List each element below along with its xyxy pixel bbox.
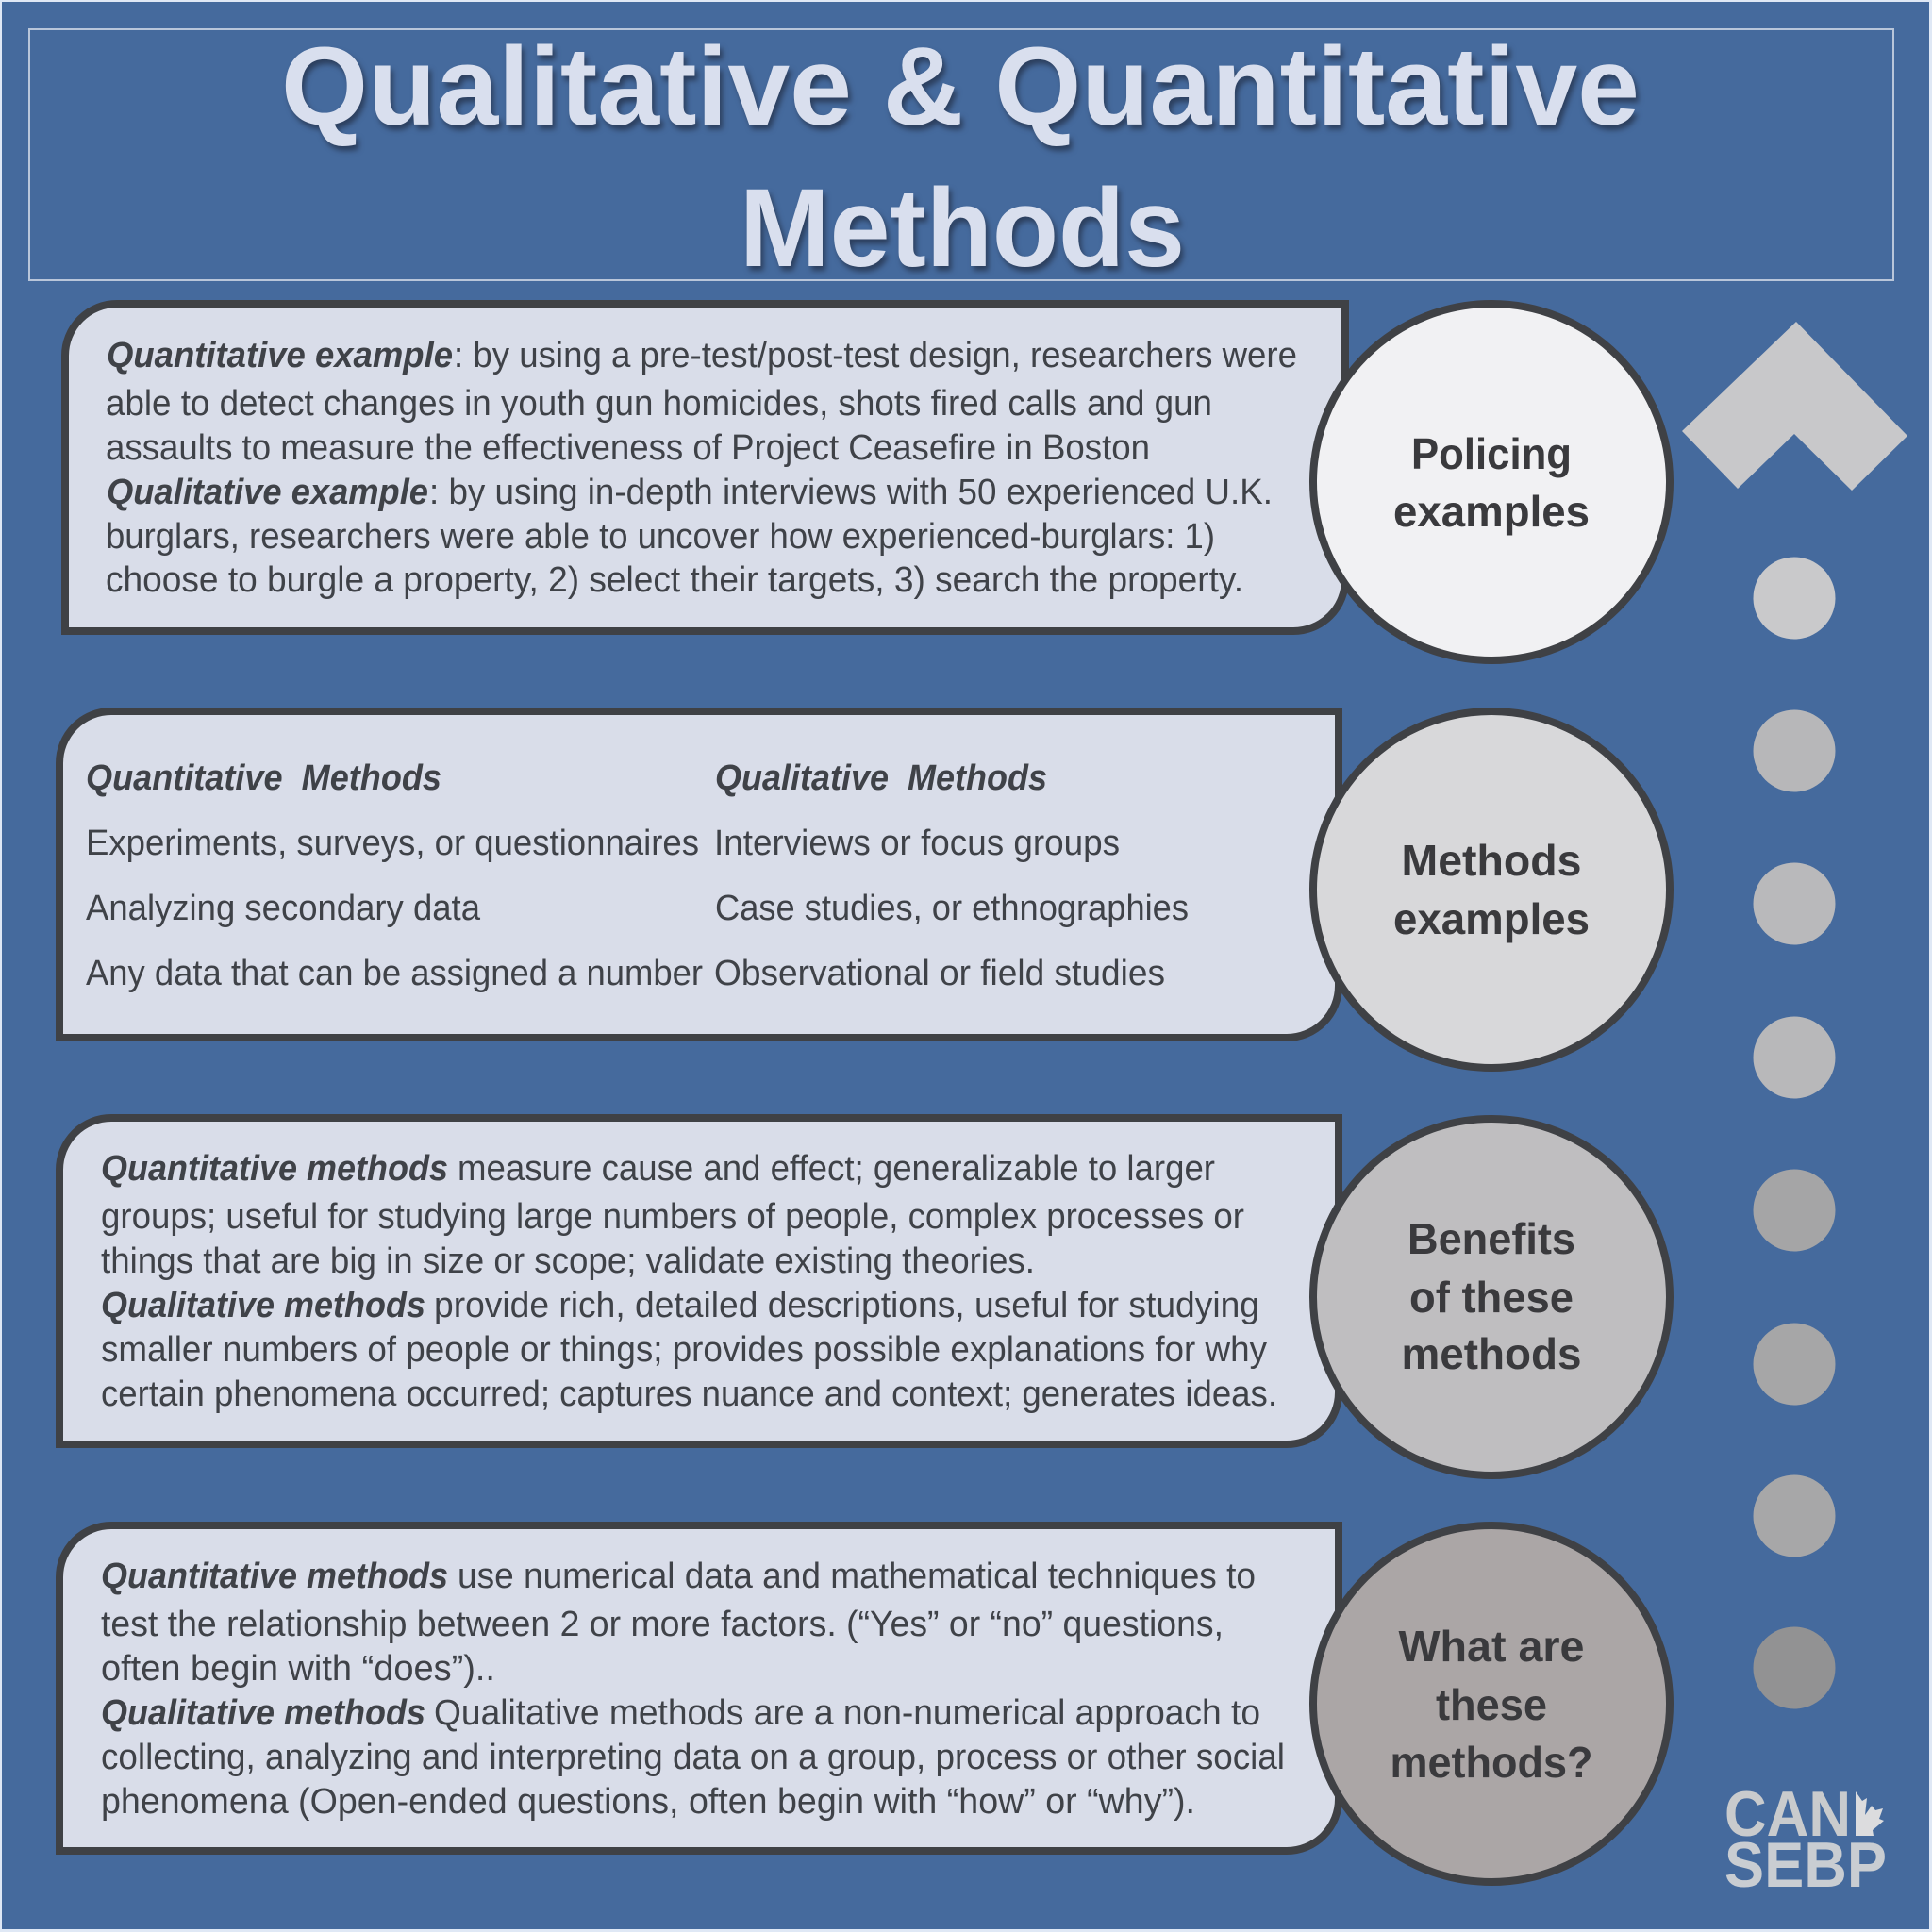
circle: methods examples: examples xyxy=(1393,894,1590,943)
circle: what are these methods xyxy=(1313,1525,1670,1882)
panel: policing examples: Quantitative example xyxy=(107,336,453,375)
panel: what are these methods: Qualitative methods xyxy=(101,1693,425,1733)
circle: what are these methods: What are xyxy=(1398,1622,1585,1671)
panel: policing examples: burglars, researchers were able to uncover how experienced-burglars: 1) xyxy=(106,517,1215,557)
panel: methods examples: Case studies, or ethnographies xyxy=(715,889,1189,928)
logo: CAN SEBP: SEBP xyxy=(1724,1829,1887,1901)
circle: benefits of these methods: of these xyxy=(1409,1273,1574,1322)
panel: what are these methods: test the relationship between 2 or more factors. (“Yes” or “no” questions, xyxy=(101,1605,1224,1644)
panel: benefits of these methods: Quantitative methods xyxy=(101,1149,448,1189)
icon: half maple leaf xyxy=(1856,1791,1884,1836)
circle: benefits of these methods: methods xyxy=(1402,1329,1581,1378)
circle: methods examples: Methods xyxy=(1402,836,1581,885)
panel: policing examples: assaults to measure the effectiveness of Project Ceasefire in Boston xyxy=(106,428,1150,468)
panel: benefits of these methods: provide rich, detailed descriptions, useful for studying xyxy=(434,1286,1259,1325)
panel: benefits of these methods: groups; useful for studying large numbers of people, complex processes or xyxy=(101,1197,1244,1237)
panel: what are these methods: Qualitative methods are a non-numerical approach to xyxy=(434,1693,1260,1733)
panel: benefits of these methods: measure cause and effect; generalizable to larger xyxy=(458,1149,1215,1189)
panel: methods examples: Quantitative Methods xyxy=(86,758,441,798)
circle: methods examples xyxy=(1313,711,1670,1068)
dotted arrow stem xyxy=(1753,557,1836,1709)
panel: methods examples xyxy=(59,711,1339,1038)
panel: benefits of these methods: things that are big in size or scope; validate existing theories. xyxy=(101,1241,1035,1281)
panel: policing examples: : by using in-depth interviews with 50 experienced U.K. xyxy=(429,473,1273,512)
title text xyxy=(281,25,1640,291)
panel: benefits of these methods: smaller numbers of people or things; provides possible explanations for why xyxy=(101,1330,1267,1370)
circle: what are these methods: these xyxy=(1436,1680,1547,1729)
panel: methods examples: Analyzing secondary data xyxy=(86,889,481,928)
title text: Qualitative & Quantitative xyxy=(281,25,1640,149)
panel: policing examples: : by using a pre-test/post-test design, researchers were xyxy=(454,336,1297,375)
title banner xyxy=(29,25,1893,291)
logo: CAN SEBP xyxy=(1724,1778,1887,1901)
logo: CAN SEBP: CAN xyxy=(1724,1778,1851,1850)
arrow: upward chevron xyxy=(1682,322,1907,491)
panel: policing examples: able to detect changes in youth gun homicides, shots fired calls and gun xyxy=(106,384,1212,424)
panel: what are these methods: often begin with “does”).. xyxy=(101,1649,495,1689)
panel: policing examples: Qualitative example xyxy=(107,473,428,512)
panel: methods examples: Interviews or focus groups xyxy=(714,824,1120,863)
circle: benefits of these methods: Benefits xyxy=(1407,1214,1575,1263)
circle: policing examples: examples xyxy=(1393,487,1590,536)
panel: benefits of these methods: certain phenomena occurred; captures nuance and context; generates ideas. xyxy=(101,1374,1277,1414)
panel: policing examples: choose to burgle a property, 2) select their targets, 3) search the property. xyxy=(106,560,1243,600)
panel: what are these methods: phenomena (Open-ended questions, often begin with “how” or “why”). xyxy=(101,1782,1195,1822)
panel: what are these methods: Quantitative methods xyxy=(101,1557,448,1596)
panel: what are these methods xyxy=(59,1525,1339,1851)
panel: methods examples: Any data that can be assigned a number xyxy=(86,954,703,993)
panel: benefits of these methods: Qualitative methods xyxy=(101,1286,425,1325)
panel: methods examples: Qualitative Methods xyxy=(715,758,1047,798)
circle: benefits of these methods xyxy=(1313,1119,1670,1475)
panel: methods examples: Observational or field studies xyxy=(714,954,1165,993)
panel: methods examples: Experiments, surveys, or questionnaires xyxy=(86,824,699,863)
circle: policing examples: Policing xyxy=(1411,429,1572,478)
panel: what are these methods: use numerical data and mathematical techniques to xyxy=(458,1557,1256,1596)
circle: policing examples xyxy=(1313,304,1670,660)
panel: benefits of these methods xyxy=(59,1118,1339,1444)
panel: policing examples xyxy=(65,304,1345,631)
title text: Methods xyxy=(740,166,1185,291)
circle: what are these methods: methods? xyxy=(1391,1738,1592,1787)
panel: what are these methods: collecting, analyzing and interpreting data on a group, process or other social xyxy=(101,1738,1285,1777)
